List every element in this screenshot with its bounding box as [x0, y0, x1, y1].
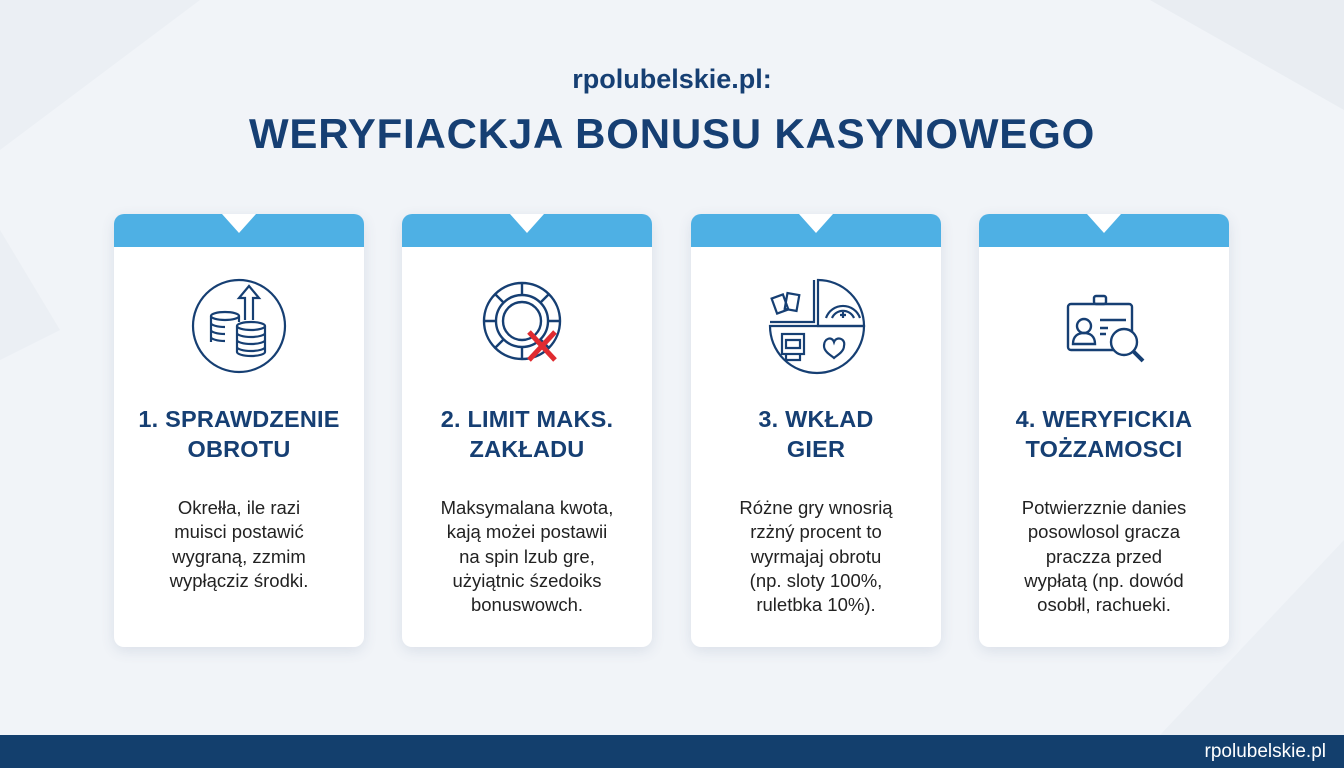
card text: użyiątnic śzedoiks	[452, 570, 602, 591]
icon: chip with red X	[482, 282, 562, 362]
panel: card 2	[402, 214, 652, 647]
panel: card 3	[691, 214, 941, 647]
card text: rzżný procent to	[750, 521, 882, 542]
card title: 3. WKŁAD	[758, 406, 874, 432]
footer bar: rpolubelskie.pl	[1205, 741, 1326, 762]
card text: Potwierzznie danies	[1022, 497, 1186, 518]
card title	[138, 406, 340, 462]
card text: ruletbka 10%).	[756, 594, 876, 615]
icon: game categories pie	[768, 278, 866, 374]
card title: ZAKŁADU	[470, 436, 584, 462]
card text: wypłącziz środki.	[170, 570, 308, 591]
card text: wypłatą (np. dowód	[1024, 570, 1184, 591]
card title: OBROTU	[187, 436, 291, 462]
card header	[402, 214, 652, 247]
card text: praczza przed	[1046, 546, 1162, 567]
card text: wyrmajaj obrotu	[751, 546, 881, 567]
card title: 2. LIMIT MAKS.	[441, 406, 613, 432]
card title	[441, 406, 613, 462]
footer bar	[0, 735, 1344, 768]
card title: GIER	[787, 436, 845, 462]
title: WERYFIACKJA BONUSU KASYNOWEGO	[249, 110, 1095, 157]
card text	[441, 497, 613, 615]
icon: ID card with magnifier	[1066, 294, 1144, 362]
card text: bonuswowch.	[471, 594, 583, 615]
card text	[739, 497, 893, 615]
card title: 4. WERYFICKIA	[1016, 406, 1192, 432]
card text: Okrełła, ile razi	[178, 497, 300, 518]
card header	[114, 214, 364, 247]
card title	[1016, 406, 1192, 462]
card text	[170, 497, 308, 591]
card header	[691, 214, 941, 247]
card title	[758, 406, 874, 462]
panel: card 1	[114, 214, 364, 647]
card text: Maksymalana kwota,	[441, 497, 613, 518]
icon: coins with arrow	[192, 278, 286, 374]
subtitle: rpolubelskie.pl:	[572, 64, 772, 94]
card text	[1022, 497, 1186, 615]
card header	[979, 214, 1229, 247]
card text: wygraną, zzmim	[172, 546, 306, 567]
card title: 1. SPRAWDZENIE	[138, 406, 340, 432]
card title: TOŻZAMOSCI	[1026, 436, 1182, 462]
card text: muisci postawić	[174, 521, 304, 542]
card text: Różne gry wnosrią	[739, 497, 893, 518]
panel: card 4	[979, 214, 1229, 647]
card text: na spin lzub gre,	[459, 546, 595, 567]
card text: osobłl, rachueki.	[1037, 594, 1171, 615]
card text: (np. sloty 100%,	[750, 570, 882, 591]
card text: kają możei postawii	[447, 521, 607, 542]
card text: posowlosol gracza	[1028, 521, 1180, 542]
